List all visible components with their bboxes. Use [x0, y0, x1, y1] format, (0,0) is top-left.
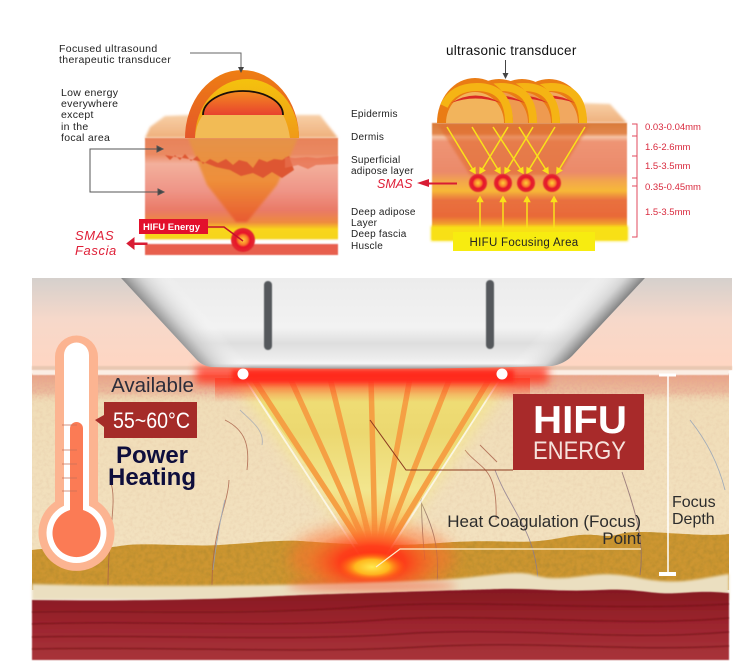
- fat layer: [32, 532, 729, 590]
- dermis: [32, 373, 729, 553]
- focus depth marker: Focus: [672, 494, 716, 511]
- layer labels: Epidermis: [351, 109, 398, 120]
- label: focused ultrasound transducer: Focused ultrasound: [59, 43, 158, 55]
- panel: HIFU skin cross-section: [32, 278, 732, 660]
- red fade under heat band: [215, 378, 530, 402]
- depth values: 0.35-0.45mm: [645, 182, 701, 193]
- skin top face: [560, 103, 627, 123]
- scale ticks: [62, 425, 77, 491]
- label: power heating: Heating: [108, 464, 196, 491]
- soft yellow halo: [232, 378, 512, 545]
- energy cone: [188, 138, 298, 222]
- layer labels: Layer: [351, 218, 378, 229]
- label: ultrasonic transducer: ultrasonic transducer: [446, 43, 577, 58]
- fascia red tint: [287, 580, 457, 592]
- HIFU energy callout: ENERGY: [533, 437, 626, 465]
- HIFU energy callout: [370, 394, 644, 470]
- mercury: [52, 422, 101, 557]
- epidermis line: [32, 366, 732, 375]
- dermis pink texture: [32, 374, 729, 404]
- depth values: 1.5-3.5mm: [645, 207, 690, 218]
- dermis band right: [285, 156, 338, 169]
- label: available: Available: [111, 374, 194, 397]
- energy tint: [438, 125, 590, 175]
- fascia band: [32, 573, 729, 600]
- skin block cross-section: [145, 138, 338, 255]
- temperature badge: 55~60°C: [113, 408, 190, 433]
- panel: single focus diagram: [59, 43, 338, 258]
- probe slot left: [264, 281, 272, 350]
- layer labels: Superficial: [351, 155, 400, 166]
- orange HIFU rays: [253, 378, 490, 545]
- arrow: SMAS fascia: [127, 238, 147, 249]
- dome 4: [511, 79, 587, 123]
- emitter dots: [238, 368, 508, 380]
- HIFU energy tag: [139, 219, 243, 241]
- focus depth marker: [659, 374, 716, 576]
- depth scale: [632, 124, 637, 237]
- HIFU energy callout: HIFU: [533, 399, 627, 442]
- arrow: low energy bracket: [90, 146, 164, 195]
- arrow: to transducer: [190, 53, 241, 72]
- label: SMAS fascia: SMAS: [75, 228, 114, 243]
- ultrasound probe: [121, 278, 645, 369]
- layer labels: Huscle: [351, 241, 383, 252]
- heat coagulation label: Point: [602, 529, 641, 548]
- blood vessels: [108, 410, 725, 585]
- label: low energy: Low energy: [61, 87, 119, 99]
- dome 2: [461, 79, 537, 123]
- depth values: 1.5-3.5mm: [645, 161, 690, 172]
- muscle: [32, 589, 729, 660]
- heat coagulation label: [376, 512, 641, 567]
- sky backdrop: [32, 278, 732, 370]
- heat coagulation label: Heat Coagulation (Focus): [447, 512, 641, 531]
- label: low energy: in the: [61, 121, 88, 133]
- dermis zigzag: [165, 154, 294, 178]
- HIFU focusing area label: [453, 232, 595, 251]
- label: focused ultrasound transducer: therapeutic transducer: [59, 54, 171, 66]
- depth values: 1.6-2.6mm: [645, 142, 690, 153]
- focus rings: [469, 174, 561, 192]
- layer labels: Deep adipose: [351, 207, 416, 218]
- dome 3: [484, 79, 560, 123]
- arrow: to domes: [504, 60, 506, 78]
- layer labels: Dermis: [351, 132, 384, 143]
- red heat band: [196, 366, 548, 384]
- depth values: 0.03-0.04mm: [645, 122, 701, 133]
- label: low energy: except: [61, 109, 94, 121]
- thermometer casing: [38, 336, 114, 571]
- skin cross-section: [432, 123, 627, 240]
- transducer dome: [185, 70, 299, 138]
- probe slot right: [486, 280, 494, 349]
- skin block top face: [145, 115, 338, 138]
- focus depth marker: Depth: [672, 511, 715, 528]
- muscle fibres: [32, 604, 729, 650]
- layer labels: Deep fascia: [351, 229, 407, 240]
- dome 1: [437, 78, 513, 123]
- thermometer: [38, 336, 114, 571]
- focal point: [231, 228, 255, 252]
- label: SMAS: SMAS: [377, 177, 413, 191]
- energy cone: [243, 376, 502, 566]
- focus core: [338, 552, 406, 582]
- layer labels: adipose layer: [351, 166, 414, 177]
- label: power heating: Power: [116, 442, 188, 469]
- focus glow: [290, 524, 454, 594]
- transducer domes: [437, 78, 587, 123]
- HIFU focusing area label: HIFU Focusing Area: [470, 237, 579, 249]
- yellow focusing arrows: [447, 127, 585, 228]
- label: SMAS fascia: Fascia: [75, 243, 117, 258]
- arrow: SMAS: [417, 179, 457, 187]
- HIFU energy tag: HIFU Energy: [143, 222, 201, 233]
- thermometer inner: [47, 342, 107, 563]
- label: low energy: everywhere: [61, 98, 118, 110]
- white cone edges: [243, 376, 502, 556]
- panel: multi focus diagram: [351, 43, 701, 252]
- temperature badge: [95, 402, 197, 438]
- yellow base strip: [431, 226, 628, 241]
- label: low energy: focal area: [61, 132, 110, 144]
